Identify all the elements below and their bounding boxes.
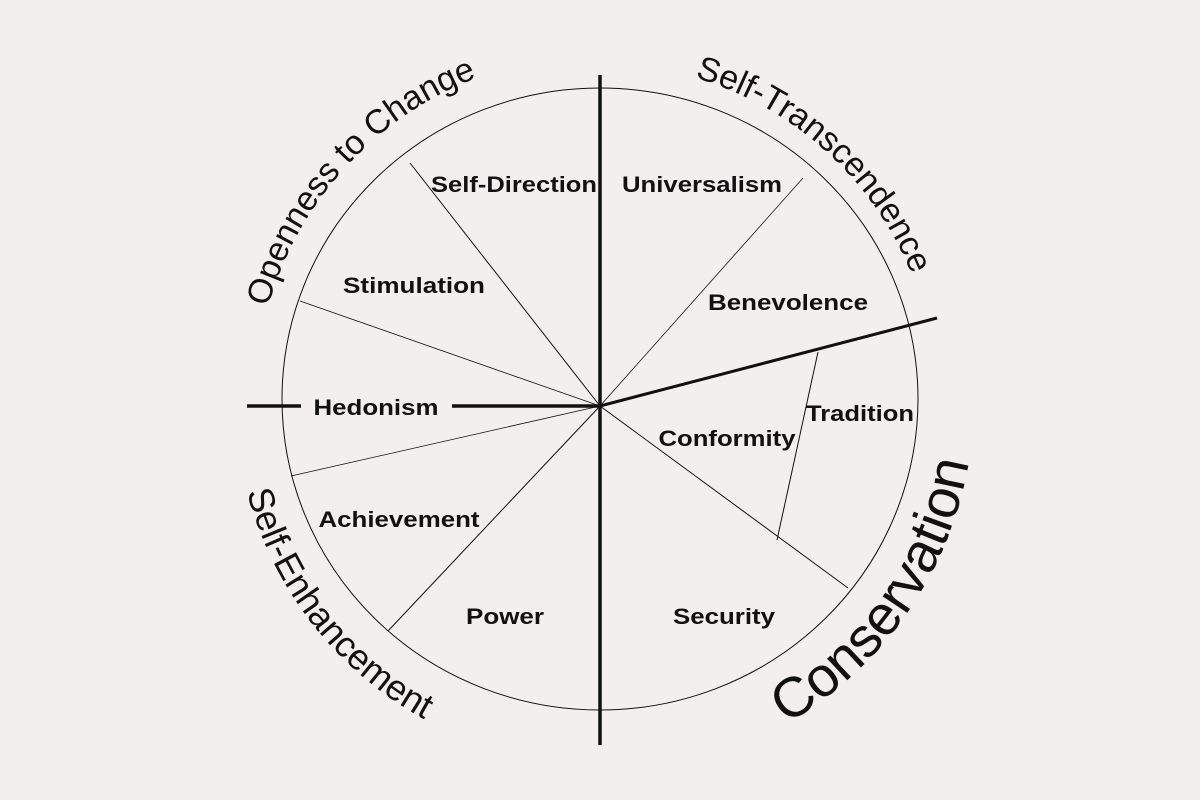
- label: Stimulation: Stimulation: [343, 273, 485, 298]
- heading: Self-Enhancement: Self-Enhancement: [249, 489, 434, 719]
- label: Achievement: Achievement: [318, 507, 480, 532]
- label: Tradition: Tradition: [806, 401, 914, 426]
- label: Benevolence: Benevolence: [708, 290, 868, 315]
- heading: Self-Transcendence: Self-Transcendence: [698, 58, 926, 272]
- label: Universalism: Universalism: [622, 172, 782, 197]
- label: Self-Direction: Self-Direction: [431, 172, 597, 197]
- heading: Conservation: Conservation: [774, 461, 968, 717]
- label: Security: Security: [673, 604, 776, 629]
- label: Power: Power: [466, 604, 545, 629]
- label: Hedonism: Hedonism: [314, 395, 438, 420]
- wheel: circle and sector lines: [247, 75, 937, 745]
- label: Conformity: Conformity: [658, 426, 796, 451]
- value labels: [314, 172, 914, 629]
- heading: Openness to Change: Openness to Change: [248, 64, 474, 303]
